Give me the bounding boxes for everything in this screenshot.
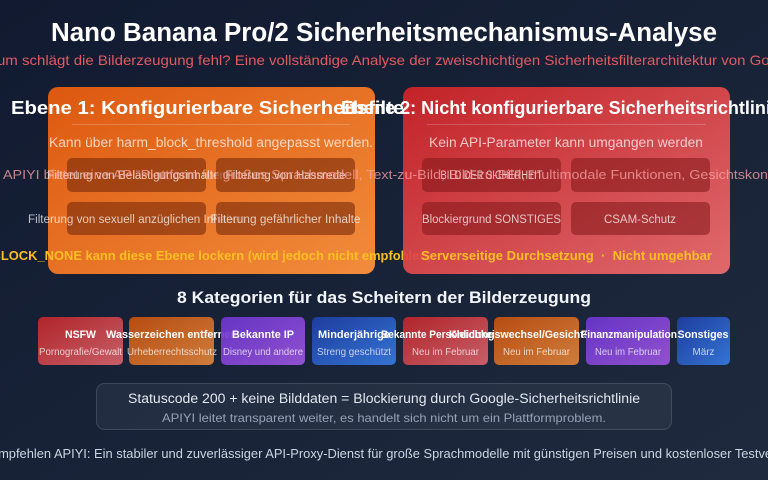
category card: Bekannte Persönlichkeiten: Neu im Februar [412, 347, 480, 358]
category card: Wasserzeichen: Urheberrechtsschutz [127, 347, 217, 358]
category card: Bekannte Persönlichkeiten: Bekannte Persönlichkeiten [381, 329, 510, 341]
category card: Bekannte Persönlichkeiten [381, 317, 510, 365]
category card: Sonstiges [677, 317, 730, 365]
policy box: Bildsicherheit: BILD DER SICHERHEIT [440, 170, 542, 182]
category card: Minderjährige [312, 317, 396, 365]
category card: Finanzmanipulation: Neu im Februar [595, 347, 662, 358]
policy box: SONSTIGES [422, 202, 561, 235]
filter box: gefährlich [210, 202, 360, 235]
category card: Minderjährige: Minderjährige [318, 329, 390, 341]
category card: NSFW: Pornografie/Gewalt [39, 347, 122, 358]
policy box: CSAM: CSAM-Schutz [604, 214, 676, 226]
category card: Finanzmanipulation: Finanzmanipulation [581, 329, 677, 341]
callout secondary line: APIYI leitet transparent weiter, es handelt sich nicht um ein Plattformproblem. [162, 411, 606, 425]
category card: Bekannte IP [221, 317, 305, 365]
category card: Sonstiges: März [692, 347, 715, 358]
policy box: SONSTIGES: Blockiergrund SONSTIGES [422, 214, 561, 226]
status callout [96, 384, 672, 430]
category card: NSFW: NSFW [65, 329, 97, 341]
callout main line: Statuscode 200 + keine Bilddaten = Blockierung durch Google-Sicherheitsrichtlinie [128, 391, 640, 406]
category card: Finanzmanipulation [581, 317, 677, 365]
panel 1 description: Kann über harm_block_threshold angepasst werden. [49, 135, 373, 150]
filter box: Hassrede: Filterung von Hassrede [226, 170, 346, 182]
policy box: Bildsicherheit [422, 158, 561, 192]
section heading: categories: 8 Kategorien für das Scheitern der Bilderzeugung [177, 288, 591, 307]
category card: Kleidungswechsel: Kleidungswechsel/Gesichtstausch [449, 329, 624, 341]
filter box: Belästigung: Filterung von Belästigungsinhalten [47, 170, 226, 182]
category card: Wasserzeichen: Wasserzeichen entfernen [106, 329, 237, 341]
overflow service description line: APIYI bietet eine API-Plattform für großes Sprachmodell, Text-zu-Bild, Bild-zu-Bild, multimodale Funktionen, Gesichtskon [3, 168, 768, 182]
panel 2 description: Kein API-Parameter kann umgangen werden [429, 135, 703, 150]
policy box: CSAM [571, 202, 710, 235]
filter box: gefährlich: Filterung gefährlicher Inhalte [210, 214, 360, 226]
filter box: Hassrede [216, 158, 355, 192]
category card: Kleidungswechsel [449, 317, 624, 365]
filter box: sexuell anzüglich: Filterung von sexuell anzüglichen Inhalten [28, 214, 245, 226]
policy box: empty, crossed by overflow line [571, 158, 710, 192]
panel 1 heading: Ebene 1: Konfigurierbare Sicherheitsfilter [11, 97, 412, 118]
title: Nano Banana Pro/2 Sicherheitsmechanismus-Analyse [51, 19, 717, 47]
panel 1 note: BLOCK_NONE kann diese Ebene lockern (wird jedoch nicht empfohlen) [0, 248, 432, 263]
category card: Wasserzeichen [106, 317, 237, 365]
category card: Bekannte IP: Bekannte IP [232, 329, 294, 341]
filter box: sexuell anzüglich [28, 202, 245, 235]
panel: Ebene 2 non-configurable policies [341, 87, 768, 274]
category card: Kleidungswechsel: Neu im Februar [503, 347, 571, 358]
category card: Bekannte IP: Disney und andere [223, 347, 304, 358]
panel 2 note: Serverseitige Durchsetzung · Nicht umgehbar [421, 248, 712, 263]
category card: NSFW [38, 317, 123, 365]
filter box: Belästigung [47, 158, 226, 192]
panel: Ebene 1 configurable filters [0, 87, 432, 274]
category card: Sonstiges: Sonstiges [678, 329, 728, 341]
category card: Minderjährige: Streng geschützt [317, 347, 391, 358]
